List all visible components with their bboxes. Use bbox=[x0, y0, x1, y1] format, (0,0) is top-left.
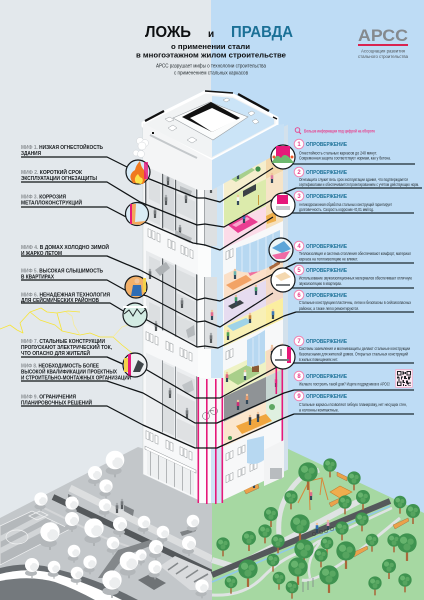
refutation 8 bbox=[294, 371, 390, 386]
rule 7 bbox=[277, 363, 414, 368]
refutation 5: звукоизоляцию в квартирах. bbox=[299, 281, 342, 286]
refutation 6: 6 bbox=[297, 293, 301, 299]
myth 6: МИФ 6. НЕНАДЕЖНАЯ ТЕХНОЛОГИЯ bbox=[21, 292, 110, 298]
refutation 9: 9 bbox=[297, 394, 301, 400]
subtitle: о применении стали bbox=[171, 42, 250, 51]
background: false side bbox=[0, 0, 211, 600]
refutation 4: каркаса на теплоизоляцию не влияет. bbox=[299, 256, 358, 262]
refutation 1: Огнестойкость стальных каркасов до 240 минут. bbox=[299, 150, 377, 156]
refutation 4: ОПРОВЕРЖЕНИЕ bbox=[306, 244, 347, 250]
myth 9: ПЛАНИРОВОЧНЫХ РЕШЕНИЙ bbox=[21, 398, 92, 406]
subtitle bbox=[136, 42, 286, 60]
smoke from fire bbox=[133, 138, 148, 158]
intro: АРСС разрушает мифы о технологии строительства bbox=[156, 64, 266, 70]
myth 1: ЗДАНИЯ bbox=[21, 151, 41, 157]
benches orange bbox=[244, 472, 409, 557]
benches grey bbox=[68, 494, 196, 536]
refutation 3 bbox=[294, 191, 393, 212]
roof vents bbox=[165, 98, 259, 143]
logo АРСС: стального строительства bbox=[358, 54, 409, 59]
trees: white courtyard trees bbox=[25, 451, 209, 598]
refutation 2 bbox=[294, 167, 419, 187]
myth 6 bbox=[21, 292, 110, 304]
line: myth 3 bbox=[21, 207, 273, 250]
myth 7: ПРОПУСКАЮТ ЭЛЕКТРИЧЕСКИЙ ТОК, bbox=[21, 343, 112, 351]
path and crossing bbox=[98, 540, 155, 578]
refutation 9 bbox=[294, 391, 407, 412]
subtitle: в многоэтажном жилом строительстве bbox=[136, 50, 286, 60]
refutation 6: районах, а также легко ремонтируются. bbox=[299, 305, 359, 311]
refutation 6: ОПРОВЕРЖЕНИЕ bbox=[306, 293, 347, 299]
pond bbox=[0, 564, 138, 600]
myth 2: ЭКСПЛУАТАЦИИ ОГНЕЗАЩИТЫ bbox=[21, 176, 97, 182]
floor rooms bbox=[224, 148, 283, 447]
cyclists bbox=[312, 520, 334, 536]
walkway grey bbox=[70, 488, 212, 559]
paved garden bbox=[160, 556, 212, 590]
lower paths bbox=[212, 553, 298, 595]
right facade bbox=[216, 125, 288, 503]
myth 3 bbox=[21, 194, 82, 206]
roof outline bbox=[145, 91, 277, 134]
swing bbox=[298, 478, 328, 510]
facade windows band 2 bbox=[146, 332, 192, 361]
trees: green park trees bbox=[216, 458, 420, 599]
rule 8 bbox=[294, 389, 414, 391]
road green side bbox=[212, 501, 390, 575]
refutation 5: 5 bbox=[297, 268, 301, 274]
myth 5: МИФ 5. ВЫСОКАЯ СЛЫШИМОСТЬ bbox=[21, 268, 103, 274]
circle: sound proofing bbox=[271, 268, 295, 292]
corner column bbox=[198, 165, 223, 503]
myth 9 bbox=[21, 394, 92, 406]
bridge bbox=[303, 578, 313, 592]
ground: green park bbox=[212, 447, 424, 600]
refutation 1 bbox=[294, 139, 391, 160]
logo АРСС bbox=[358, 26, 409, 59]
facade windows band 1 bbox=[148, 229, 193, 259]
circle: grounding bbox=[271, 345, 295, 369]
cutaway floors 7-9 bbox=[146, 353, 197, 449]
title bbox=[145, 24, 293, 41]
myth 8: ВЫСОКОЙ КВАЛИФИКАЦИИ ПРОЕКТНЫХ bbox=[21, 368, 117, 376]
myth 6: ДЛЯ СЕЙСМИЧЕСКИХ РАЙОНОВ bbox=[21, 296, 99, 304]
detail circles: myths bbox=[123, 160, 150, 377]
more info note: Больше информации под цифрой на обороте bbox=[304, 128, 375, 134]
line: myth 1 bbox=[21, 157, 273, 202]
myth 3: МИФ 3. КОРРОЗИЯ bbox=[21, 194, 66, 200]
line: myth 5 bbox=[21, 280, 273, 327]
refutation 3: 3 bbox=[297, 194, 301, 200]
line: myth 2 bbox=[21, 182, 296, 227]
refutation 1: Современная защита соответствует нормам, как у бетона. bbox=[299, 156, 391, 160]
circle: fire bbox=[126, 160, 150, 184]
myth 9: МИФ 9. ОГРАНИЧЕНИЯ bbox=[21, 394, 76, 400]
roof bbox=[143, 91, 284, 190]
refutation 3: ОПРОВЕРЖЕНИЕ bbox=[306, 194, 347, 200]
rule 1 bbox=[290, 163, 415, 165]
cutaway floors 4-6 bbox=[146, 251, 197, 347]
building bbox=[133, 91, 288, 504]
rule 9 bbox=[294, 413, 414, 415]
myth 5: В КВАРТИРАХ bbox=[21, 274, 54, 280]
refutation 6 bbox=[294, 290, 412, 311]
rule 5 bbox=[290, 287, 414, 289]
rule 4 bbox=[296, 262, 414, 264]
corner strips bbox=[217, 176, 223, 350]
circle: seismic bbox=[123, 303, 147, 327]
myth 4 bbox=[21, 243, 109, 257]
myth 2: МИФ 2. КОРОТКИЙ СРОК bbox=[21, 168, 83, 176]
refutation 3: долговечность. Скорость коррозии <0,01 мм/год. bbox=[299, 207, 374, 212]
refutation 8: 8 bbox=[297, 374, 301, 380]
title: ЛОЖЬ bbox=[145, 24, 191, 41]
road grey bbox=[53, 497, 212, 573]
left facade bbox=[143, 125, 199, 501]
myth 7: МИФ 7. СТАЛЬНЫЕ КОНСТРУКЦИИ bbox=[21, 339, 105, 345]
glass bay windows bbox=[236, 230, 284, 486]
walkway green side bbox=[212, 498, 365, 567]
lower facade windows bbox=[226, 237, 257, 483]
myth 7 bbox=[21, 339, 112, 357]
circle: fire resistance bbox=[271, 145, 295, 169]
refutation 1: ОПРОВЕРЖЕНИЕ bbox=[306, 142, 347, 148]
more info note bbox=[295, 128, 375, 134]
circle: comfort bbox=[125, 276, 147, 298]
sandbox bbox=[330, 486, 352, 498]
circle: steel protection bbox=[271, 193, 295, 217]
myth 2 bbox=[21, 168, 97, 182]
refutation 7 bbox=[294, 336, 410, 362]
refutation 7: в жилых помещениях нет. bbox=[299, 357, 338, 362]
refutation 9: а колонны компактные. bbox=[299, 408, 339, 412]
path curve bbox=[279, 470, 319, 535]
myth 8: МИФ 8. НЕОБХОДИМОСТЬ БОЛЕЕ bbox=[21, 364, 99, 370]
line: myth 4 bbox=[21, 256, 296, 301]
refutation 8: ОПРОВЕРЖЕНИЕ bbox=[306, 374, 347, 380]
refutation 4 bbox=[294, 241, 411, 262]
title: и bbox=[208, 29, 214, 40]
circle: corrosion bbox=[126, 202, 148, 226]
myths list bbox=[21, 143, 131, 406]
myth 7: ЧТО ОПАСНО ДЛЯ ЖИТЕЛЕЙ bbox=[21, 349, 90, 357]
entrance canopy bbox=[145, 446, 196, 497]
myth 8 bbox=[21, 364, 131, 382]
myth 5 bbox=[21, 268, 103, 280]
lightning bbox=[0, 308, 132, 353]
sports field bbox=[0, 511, 70, 565]
myth 3: МЕТАЛЛОКОНСТРУКЦИЙ bbox=[21, 198, 82, 206]
cutaway floors 1-3 bbox=[145, 155, 197, 245]
logo АРСС: Ассоциация развития bbox=[361, 48, 406, 54]
myth 4: МИФ 4. В ДОМАХ ХОЛОДНО ЗИМОЙ bbox=[21, 243, 109, 251]
light strip bbox=[42, 507, 130, 547]
blue stripe bbox=[212, 506, 390, 582]
leader lines bbox=[21, 157, 422, 448]
seated man bbox=[253, 478, 255, 488]
grey residents and furniture bbox=[149, 175, 195, 418]
myth 4: И ЖАРКО ЛЕТОМ bbox=[21, 251, 62, 257]
title: ПРАВДА bbox=[231, 24, 293, 41]
magenta steel columns bbox=[198, 366, 283, 504]
refutation 9: ОПРОВЕРЖЕНИЕ bbox=[306, 394, 347, 400]
bicycle bbox=[202, 408, 218, 420]
ground: grey courtyard bbox=[0, 447, 212, 600]
roof technical block bbox=[173, 102, 248, 140]
refutation 7: ОПРОВЕРЖЕНИЕ bbox=[306, 339, 347, 345]
line: myth 8 bbox=[21, 381, 294, 423]
myth 8: И СТРОИТЕЛЬНО-МОНТАЖНЫХ ОРГАНИЗАЦИЙ bbox=[21, 374, 131, 382]
rule 2 bbox=[296, 187, 422, 189]
refutation 5 bbox=[294, 265, 412, 286]
circle: insulation bbox=[269, 238, 293, 262]
room furnishings and residents bbox=[225, 153, 280, 440]
picnic area bbox=[138, 574, 166, 590]
line: myth 9 bbox=[21, 406, 294, 448]
rule 3 bbox=[290, 212, 414, 214]
refutation 2: 2 bbox=[297, 170, 301, 176]
line: myth 7 bbox=[21, 357, 277, 398]
intro bbox=[156, 64, 266, 76]
refutation 1: 1 bbox=[297, 142, 301, 148]
myth 1 bbox=[21, 143, 103, 157]
refutation 5: ОПРОВЕРЖЕНИЕ bbox=[306, 268, 347, 274]
myth 1: МИФ 1. НИЗКАЯ ОГНЕСТОЙКОСТЬ bbox=[21, 143, 103, 151]
refutation 7: 7 bbox=[297, 339, 301, 345]
refutation 4: 4 bbox=[297, 244, 301, 250]
facade windows band 3 bbox=[146, 431, 192, 460]
QR code bbox=[396, 370, 412, 388]
detail circles: truths bbox=[269, 145, 295, 369]
intro: с применением стальных каркасов bbox=[174, 70, 248, 76]
rule 6 bbox=[296, 311, 414, 313]
line: myth 6 bbox=[21, 303, 296, 348]
people grey bbox=[116, 499, 123, 513]
circle: electricity bbox=[123, 353, 147, 377]
refutation 2: ОПРОВЕРЖЕНИЕ bbox=[306, 170, 347, 176]
refutations list bbox=[294, 139, 419, 412]
background: truth side bbox=[211, 0, 424, 600]
child on swing bbox=[310, 490, 312, 500]
logo АРСС: АРСС bbox=[358, 26, 408, 45]
